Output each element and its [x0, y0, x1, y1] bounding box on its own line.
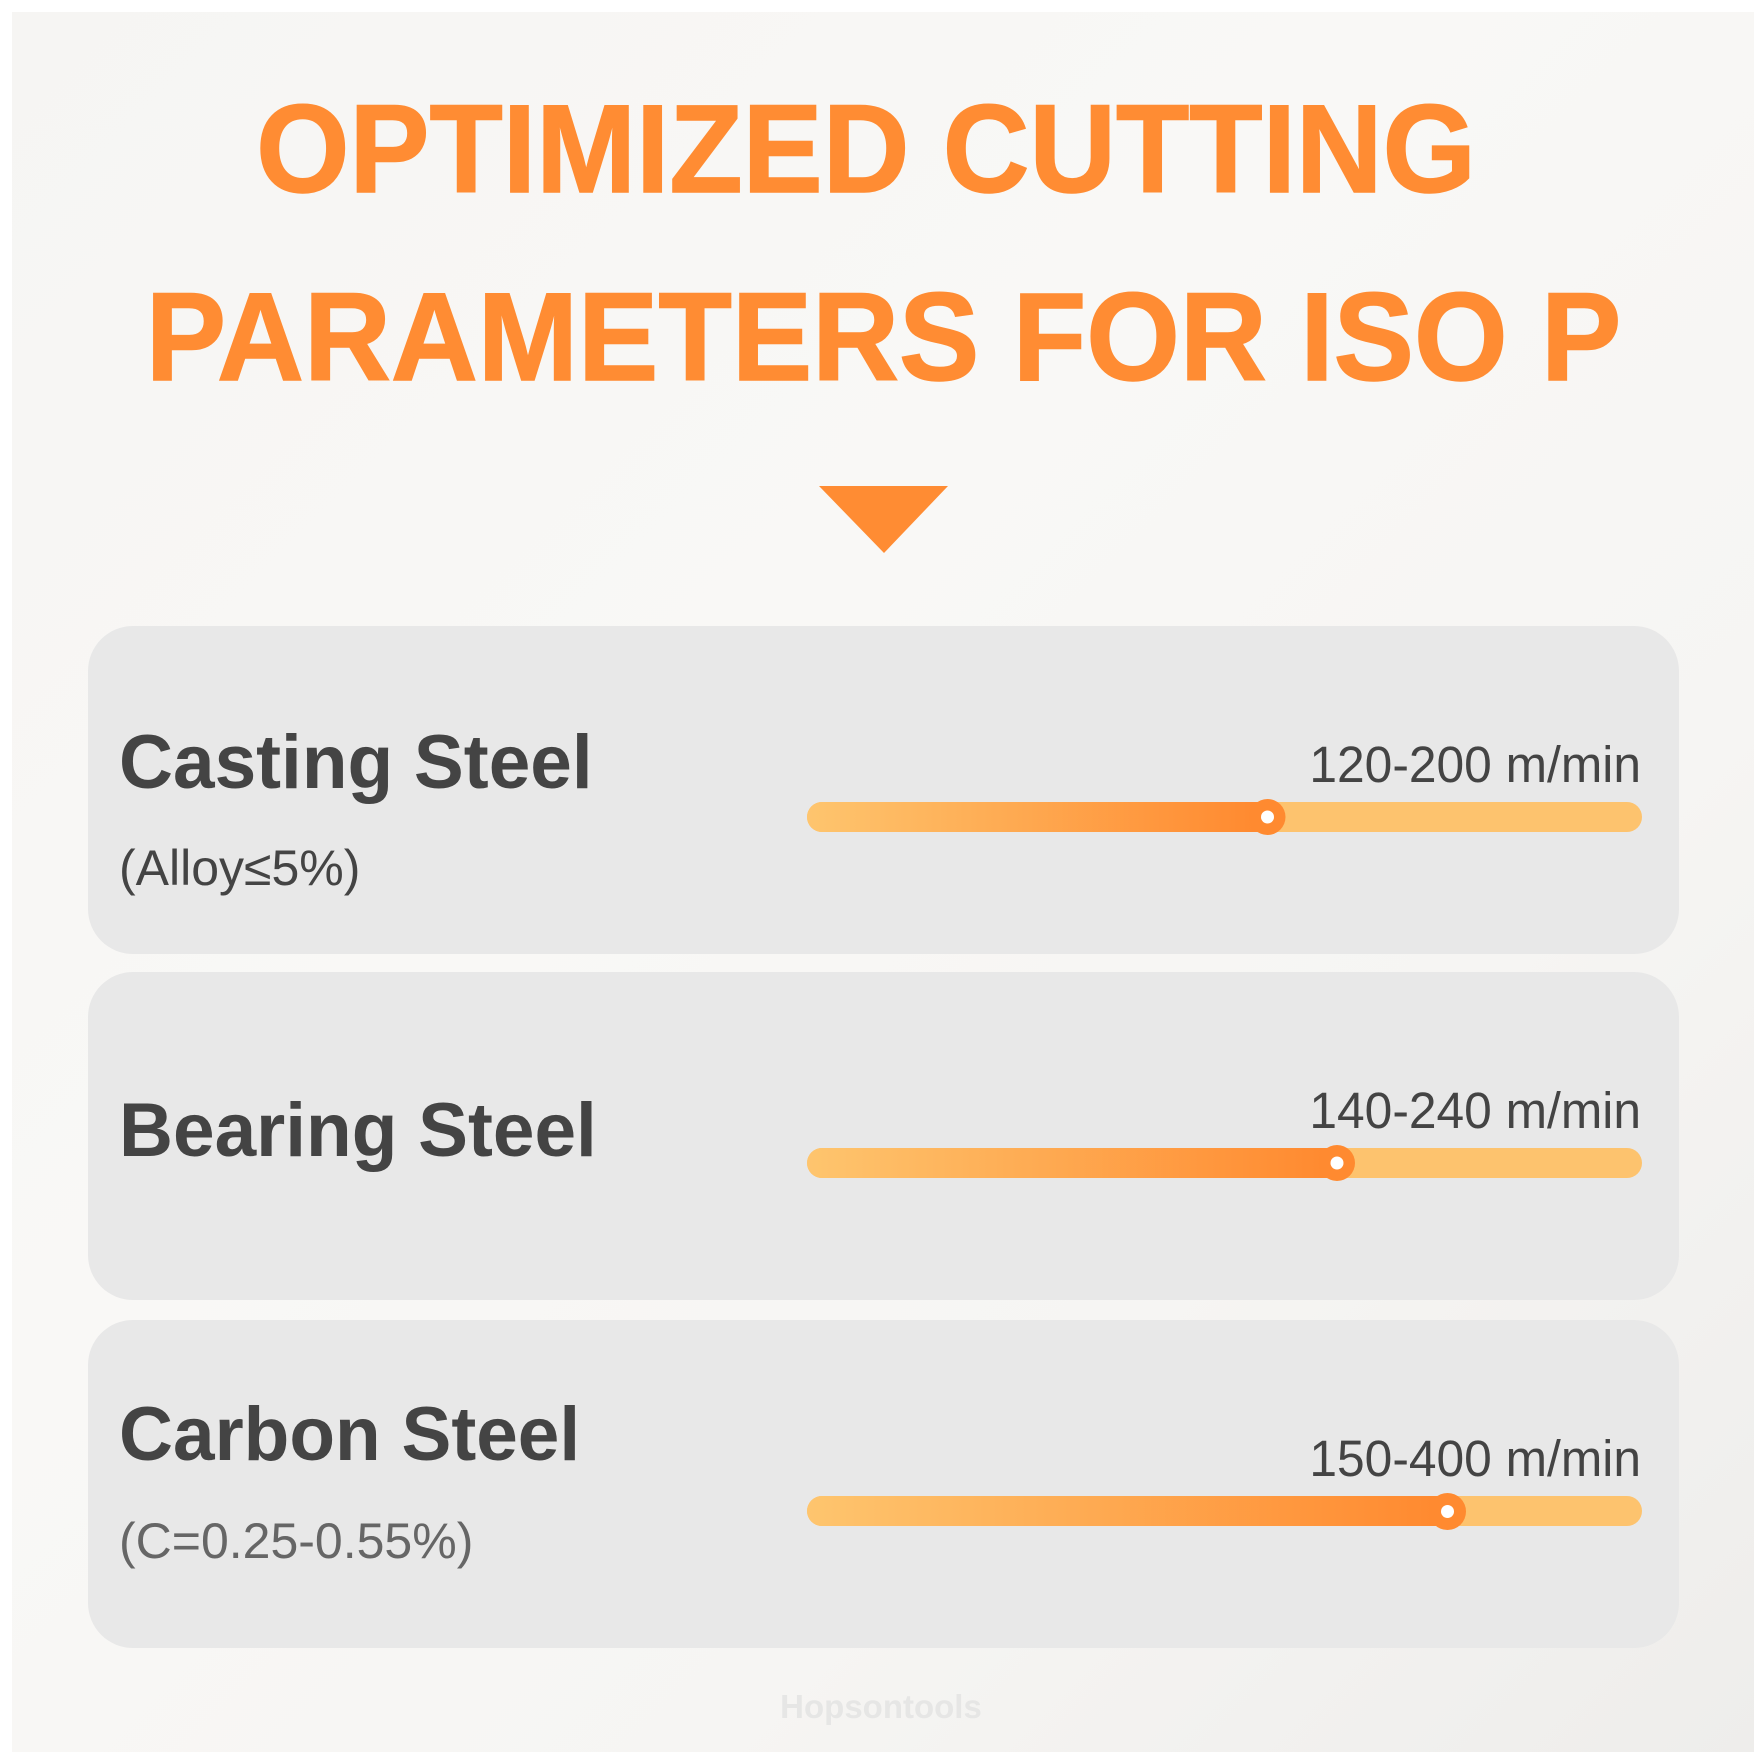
value: carbon speed: 150-400 m/min — [1309, 1429, 1641, 1487]
heading: bearing steel: Bearing Steel — [119, 1087, 597, 1172]
value: bearing speed: 140-240 m/min — [1309, 1081, 1641, 1139]
heading: carbon steel: Carbon Steel — [119, 1391, 580, 1476]
slider: bearing speed — [807, 1145, 1642, 1181]
value: casting speed: 120-200 m/min — [1309, 735, 1641, 793]
title: OPTIMIZED CUTTING — [256, 79, 1476, 219]
panel: casting steel — [88, 626, 1679, 954]
watermark: Hopsontools — [780, 1688, 982, 1725]
slider: carbon speed — [807, 1493, 1642, 1530]
slider: casting speed — [807, 799, 1642, 835]
title: PARAMETERS FOR ISO P — [146, 268, 1621, 408]
title — [146, 79, 1621, 408]
heading: casting steel: Casting Steel — [119, 719, 593, 804]
panel: bearing steel — [88, 972, 1679, 1300]
arrow: down triangle — [819, 486, 948, 553]
note: carbon: (C=0.25-0.55%) — [119, 1513, 473, 1569]
panel: carbon steel — [88, 1320, 1679, 1648]
note: alloy: (Alloy≤5%) — [119, 840, 360, 896]
